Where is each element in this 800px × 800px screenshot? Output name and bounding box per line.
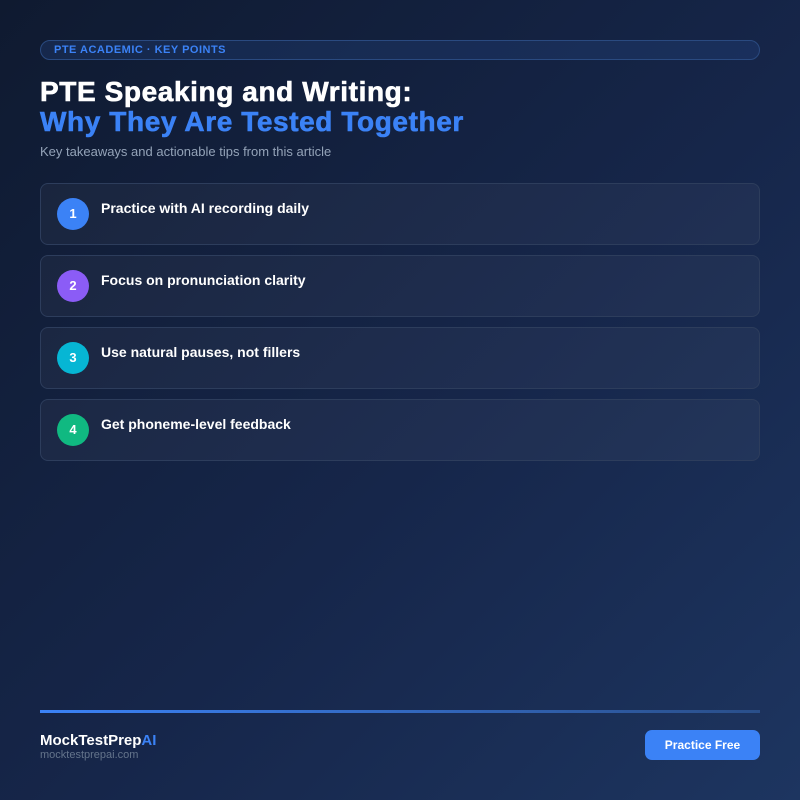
button: Practice Free [665, 738, 740, 752]
badge 2: 2 [69, 278, 77, 293]
card 1 [40, 183, 760, 245]
badge 3: 3 [69, 350, 77, 365]
text 4: Get phoneme-level feedback [101, 416, 291, 432]
badge: PTE ACADEMIC · KEY POINTS [54, 44, 226, 56]
badge 2 [57, 270, 89, 302]
subtitle: Key takeaways and actionable tips from this article [40, 144, 331, 159]
badge 1 [57, 198, 89, 230]
button [645, 730, 760, 760]
text 2: Focus on pronunciation clarity [101, 272, 306, 288]
title: PTE Speaking and Writing: [40, 76, 412, 107]
card 3 [40, 327, 760, 389]
title: Why They Are Tested Together [40, 106, 464, 137]
badge 1: 1 [69, 206, 77, 221]
text 1: Practice with AI recording daily [101, 200, 309, 216]
brand [40, 732, 156, 761]
text 3: Use natural pauses, not fillers [101, 344, 300, 360]
card 2 [40, 255, 760, 317]
title [40, 76, 464, 138]
brand: MockTestPrepAI [40, 732, 156, 749]
badge [40, 40, 760, 60]
badge 3 [57, 342, 89, 374]
brand: mocktestprepai.com [40, 749, 138, 761]
badge 4 [57, 414, 89, 446]
footer divider [40, 710, 760, 713]
badge 4: 4 [69, 422, 77, 437]
card 4 [40, 399, 760, 461]
